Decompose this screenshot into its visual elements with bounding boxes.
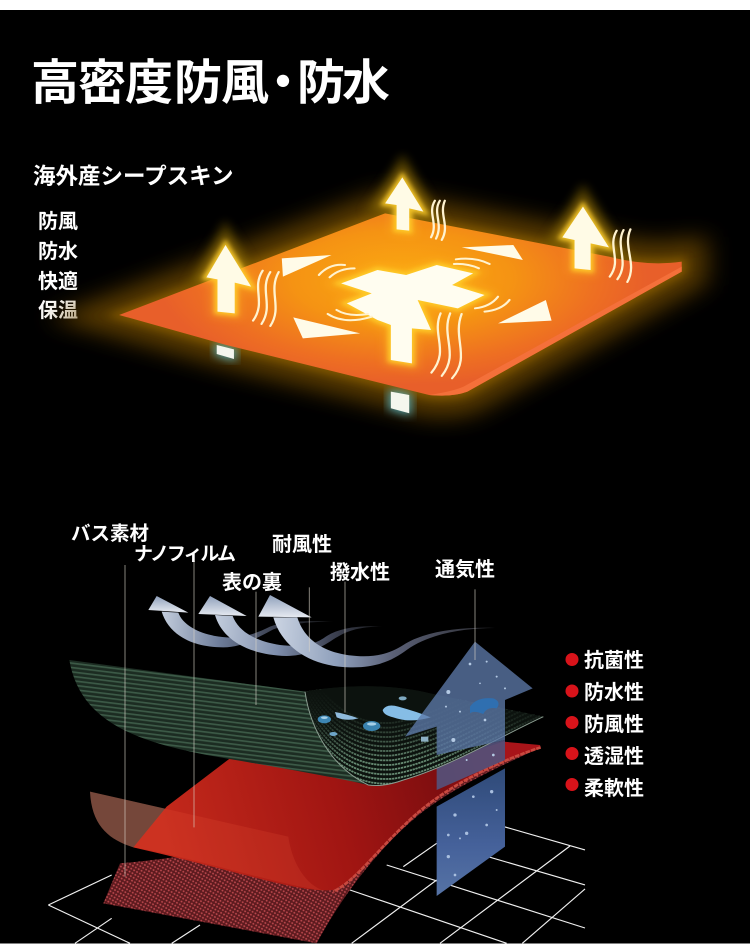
label: face and back: 表の裏	[222, 571, 282, 594]
stub: front leg	[391, 392, 409, 413]
label: base material: バス素材	[71, 523, 149, 545]
nano film: part over red	[90, 792, 323, 891]
water droplets	[318, 696, 431, 742]
feature list: sheepskin	[38, 210, 78, 322]
glow behind arrows	[206, 177, 609, 363]
subtitle: 海外産シープスキン	[33, 164, 233, 189]
label: wind resistance: 耐風性	[272, 533, 332, 556]
label: breathability: 通気性	[435, 558, 495, 581]
arrow: left	[206, 245, 251, 313]
property list	[566, 649, 644, 800]
feature list: sheepskin: 保温	[38, 299, 78, 322]
stub: left leg	[217, 345, 234, 359]
green fabric: outer face	[69, 660, 368, 785]
illustration: layered fabric diagram	[48, 560, 585, 943]
bullet: windproof: 防風性	[584, 713, 644, 736]
feature list: sheepskin: 快適	[38, 270, 78, 293]
heat waves	[253, 201, 631, 378]
curved arrow: wind 1	[148, 596, 333, 647]
green fabric: inner face	[304, 686, 544, 786]
feature list: sheepskin: 防水	[38, 240, 78, 263]
illustration: glowing sheepskin sheet	[119, 177, 682, 413]
top white band	[0, 0, 750, 10]
bullet: flexibility: 柔軟性	[584, 777, 644, 800]
label: water repellency: 撥水性	[330, 561, 390, 584]
blue arrow: section over red	[437, 740, 505, 790]
curved arrow: wind 2	[198, 596, 383, 656]
red surface	[133, 742, 541, 890]
label: nano film: ナノフィルム	[134, 544, 236, 565]
blue arrow: head and upper shaft	[405, 642, 533, 761]
orange sheet	[119, 213, 682, 396]
arrow: top	[385, 177, 423, 231]
centre cross with front arrow	[341, 265, 485, 363]
blue arrow: lower shaft	[437, 768, 505, 896]
bullet: waterproof: 防水性	[584, 681, 644, 704]
bullet: antibacterial: 抗菌性	[584, 649, 644, 672]
outward triangles	[282, 245, 552, 338]
arrow: right	[562, 207, 609, 270]
nano film: part over black	[90, 792, 323, 891]
bullet: moisture permeable: 透湿性	[584, 745, 644, 768]
title: 高密度防風・防水	[31, 57, 390, 110]
feature list: sheepskin: 防風	[38, 210, 78, 233]
base mesh layer	[103, 745, 541, 943]
floor grid	[48, 822, 585, 943]
leader lines	[125, 560, 475, 877]
curved arrow: wind 3	[258, 595, 495, 667]
red edge highlight	[333, 747, 541, 892]
bottom white band	[0, 944, 750, 949]
